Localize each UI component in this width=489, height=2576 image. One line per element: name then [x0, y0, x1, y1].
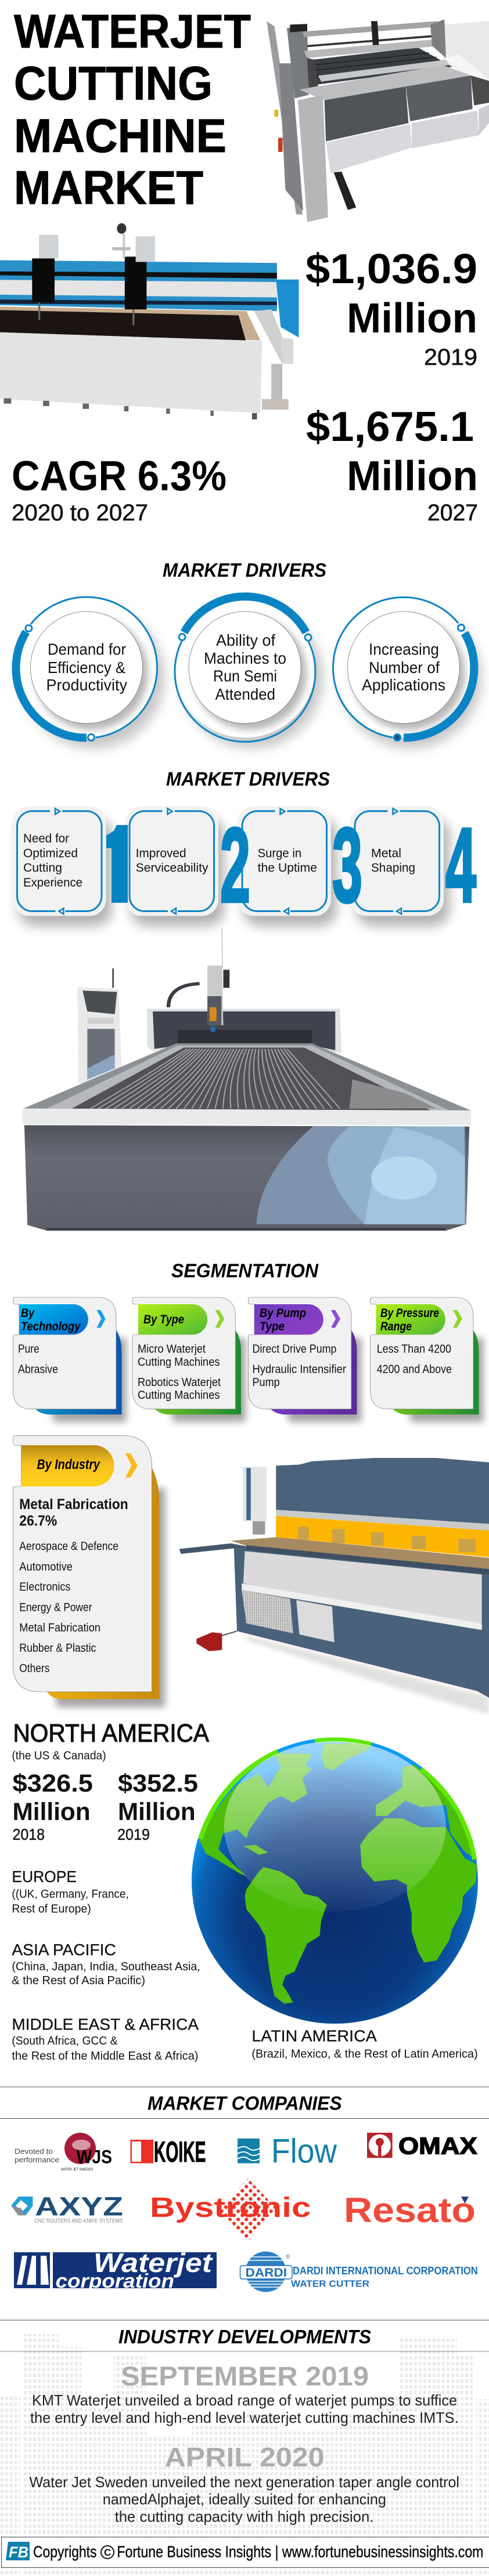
header text: Technology	[21, 1320, 81, 1333]
panel: by technology	[13, 1297, 127, 1422]
machine photo: shearing machine	[179, 1458, 489, 1714]
card 1 text: Experience	[23, 876, 82, 889]
card 4 text: Shaping	[371, 862, 415, 875]
stat: 2019	[117, 1770, 198, 1843]
footer bar	[2, 2537, 489, 2567]
panel: by pump type	[249, 1297, 361, 1422]
driver circle 2: Run Semi	[213, 667, 277, 685]
region: asia pacific: ASIA PACIFIC	[12, 1941, 116, 1959]
list: Energy & Power	[19, 1601, 92, 1614]
heading: market companies: MARKET COMPANIES	[148, 2092, 342, 2114]
title: CUTTING	[14, 57, 213, 110]
text block: april 2020: the cutting capacity with high precision.	[115, 2508, 373, 2526]
logo: Dardi: DARDI	[246, 2266, 287, 2280]
title: MARKET	[14, 161, 203, 215]
highlight: metal fabrication share: Metal Fabrication	[19, 1496, 128, 1513]
panel: by pressure range	[371, 1297, 483, 1422]
header pill	[254, 1304, 323, 1334]
header text	[21, 1307, 81, 1333]
north america	[200, 1753, 312, 1876]
stat: 2018: Million	[13, 1798, 91, 1826]
list: Hydraulic Intensifier	[252, 1363, 346, 1376]
list: Robotics Waterjet	[138, 1376, 221, 1389]
region: asia pacific: & the Rest of Asia Pacific)	[12, 1974, 145, 1987]
driver circle 2: Ability of	[216, 631, 275, 649]
heading: market drivers: MARKET DRIVERS	[163, 559, 326, 581]
list: Aerospace & Defence	[19, 1540, 118, 1553]
driver circle 1: Efficiency &	[48, 659, 125, 676]
logo: AXYZ: AXYZ	[35, 2192, 123, 2221]
stat: CAGR: CAGR 6.3%	[12, 453, 226, 500]
region: europe: Rest of Europe)	[12, 1903, 91, 1916]
stat: 2019 market value	[305, 246, 477, 370]
header text	[260, 1307, 306, 1333]
icon: chevron	[96, 1310, 106, 1327]
stat: 2019 market value: Million	[347, 295, 477, 342]
list	[18, 1343, 58, 1376]
list: Metal Fabrication	[19, 1622, 100, 1634]
logo: Resato: Resato	[344, 2191, 476, 2230]
logo: Flow: Flow	[271, 2133, 337, 2170]
list	[252, 1343, 346, 1389]
header text: By	[21, 1307, 35, 1320]
heading: industry developments: INDUSTRY DEVELOPMENTS	[118, 2326, 371, 2347]
stat: 2019 market value: 2019	[424, 345, 477, 370]
card 1 text: Optimized	[23, 847, 78, 860]
header text: By Pressure	[380, 1307, 439, 1320]
stat: 2018	[13, 1770, 93, 1843]
card 1 text	[23, 832, 82, 889]
driver circle 1: Productivity	[46, 676, 127, 694]
machine photo: large cutting bed	[23, 928, 471, 1231]
stat: 2019: $352.5	[118, 1770, 198, 1797]
text block: september 2019: SEPTEMBER 2019	[121, 2361, 369, 2392]
driver circle 3	[333, 597, 481, 748]
list	[377, 1343, 452, 1376]
text block: september 2019: the entry level and high-end level waterjet cutting machines IMTS.	[30, 2409, 459, 2426]
text block: april 2020: Water Jet Sweden unveiled the next generation taper angle control	[29, 2473, 459, 2491]
stat: 2027 market value: 2027	[427, 500, 478, 526]
region: middle east and africa	[12, 2016, 199, 2063]
list: Direct Drive Pump	[252, 1343, 337, 1356]
list: Electronics	[19, 1581, 70, 1594]
card 3 base	[238, 806, 337, 926]
stat: 2018: $326.5	[13, 1770, 93, 1797]
list: Pump	[252, 1376, 280, 1389]
logo: OMAX: OMAX	[398, 2133, 477, 2159]
card 4 base	[350, 806, 450, 926]
logo: Dardi: ®	[286, 2254, 290, 2260]
copyright text: C	[104, 2547, 111, 2558]
header pill	[19, 1304, 88, 1334]
stat: 2019: 2019	[117, 1826, 150, 1843]
machine photo: blue waterjet table	[0, 223, 299, 419]
logo: Waterjet Corporation: Waterjet	[94, 2248, 213, 2278]
stat: 2027 market value: Million	[347, 453, 478, 500]
logo: Dardi: WATER CUTTER	[291, 2280, 369, 2289]
panel: driver circles	[16, 596, 481, 748]
logo: WJS: WATER JET SWEDEN	[61, 2168, 93, 2172]
europe and asia	[376, 1765, 477, 1861]
driver circle 2: Attended	[215, 685, 275, 703]
number 2: 2	[220, 806, 250, 924]
logo: Dardi: DARDI INTERNATIONAL CORPORATION	[293, 2265, 478, 2277]
heading: segmentation: SEGMENTATION	[171, 1260, 319, 1281]
list: Cutting Machines	[138, 1356, 220, 1369]
panel: numbered driver cards	[13, 806, 476, 926]
logo: WJS	[15, 2133, 112, 2172]
logo: Waterjet Corporation: corporation	[56, 2270, 174, 2292]
stat: CAGR	[12, 453, 226, 526]
driver circle 2	[175, 596, 323, 748]
list: Less Than 4200	[377, 1343, 451, 1356]
panel: by industry	[13, 1436, 165, 1707]
highlight: metal fabrication share: 26.7%	[19, 1513, 57, 1529]
card 4 text: Metal	[371, 847, 401, 860]
card 2 text: Improved	[136, 847, 186, 860]
logo: OMAX	[367, 2133, 477, 2159]
panel: north america	[12, 1719, 210, 1843]
card 3 text: Surge in	[258, 847, 301, 860]
region: middle east and africa: MIDDLE EAST & AFRICA	[12, 2016, 199, 2034]
logo: Bystronic	[150, 2179, 311, 2241]
card 3 text	[258, 847, 317, 875]
card 2 text: Serviceability	[136, 862, 208, 875]
stat: 2027 market value	[306, 404, 478, 526]
number 1	[106, 825, 128, 903]
stat: 2018: 2018	[13, 1826, 45, 1843]
card 3 text: the Uptime	[258, 862, 317, 875]
title: MACHINE	[14, 110, 226, 162]
stat: CAGR: 2020 to 2027	[12, 500, 148, 526]
logo: Waterjet Corporation	[14, 2248, 217, 2292]
stat: 2019 market value: $1,036.9	[305, 246, 477, 292]
region: middle east and africa: (South Africa, GCC &	[12, 2035, 118, 2047]
list: Micro Waterjet	[138, 1343, 206, 1356]
region: latin america: LATIN AMERICA	[251, 2027, 377, 2045]
number 3: 3	[332, 806, 362, 924]
region: asia pacific	[12, 1941, 200, 1987]
logo: Koike	[130, 2136, 206, 2168]
icon: chevron	[453, 1310, 462, 1327]
list: Cutting Machines	[138, 1389, 220, 1402]
region: middle east and africa: the Rest of the Middle East & Africa)	[12, 2050, 199, 2063]
header text: Type	[260, 1320, 285, 1333]
list: Rubber & Plastic	[19, 1642, 96, 1655]
south america	[245, 1867, 327, 2003]
card 2 base	[125, 806, 224, 926]
card 1 text: Cutting	[23, 862, 62, 875]
machine photo: top right cutting table	[267, 19, 489, 222]
driver circle 2: Machines to	[204, 649, 286, 667]
panel: north america: NORTH AMERICA	[13, 1719, 210, 1748]
logo: WJS: WJS	[77, 2147, 112, 2168]
title: WATERJET	[14, 5, 251, 58]
region: latin america: (Brazil, Mexico, & the Rest of Latin America)	[251, 2048, 478, 2061]
copyright text: Copyrights	[33, 2543, 96, 2561]
list: Automotive	[19, 1561, 73, 1573]
logo: Bystronic: Bystronic	[150, 2193, 311, 2223]
panel: north america: (the US & Canada)	[12, 1750, 106, 1763]
africa	[360, 1818, 477, 1963]
driver circle 3: Increasing	[369, 641, 439, 659]
list	[19, 1540, 118, 1675]
header pill	[376, 1304, 445, 1334]
region: europe	[12, 1868, 129, 1916]
header text: By Pump	[260, 1307, 306, 1320]
panel: by type	[132, 1297, 246, 1422]
text block: april 2020: namedAlphajet, ideally suited for enhancing	[103, 2491, 386, 2508]
icon: chevron	[125, 1453, 138, 1478]
stat: 2027 market value: $1,675.1	[306, 404, 474, 450]
text block: april 2020	[29, 2442, 459, 2526]
driver circle 1: Demand for	[48, 641, 126, 659]
list	[138, 1343, 221, 1402]
stat: 2019: Million	[118, 1798, 196, 1826]
illustration: globe	[192, 1738, 478, 2024]
region: europe: EUROPE	[12, 1868, 77, 1886]
region: latin america	[251, 2027, 478, 2061]
text block: april 2020: APRIL 2020	[165, 2442, 324, 2472]
heading: market drivers second: MARKET DRIVERS	[166, 768, 330, 790]
list: Abrasive	[18, 1363, 58, 1376]
panel: company logos	[11, 2133, 478, 2292]
list: Others	[19, 1662, 49, 1675]
region: asia pacific: (China, Japan, India, Southeast Asia,	[12, 1960, 200, 1973]
header text: By Industry	[37, 1457, 100, 1472]
text block: september 2019: KMT Waterjet unveiled a broad range of waterjet pumps to suffice	[32, 2392, 457, 2409]
text block: september 2019	[30, 2361, 459, 2426]
header text	[380, 1307, 439, 1333]
logo: WJS: Devoted to	[15, 2147, 53, 2156]
driver circle 1	[16, 597, 164, 748]
card 4 text	[371, 847, 415, 875]
logo: Koike: KOIKE	[154, 2136, 206, 2168]
header pill	[21, 1445, 114, 1486]
header pill	[138, 1304, 207, 1334]
header text: By Type	[143, 1313, 184, 1326]
greenland	[321, 1743, 371, 1771]
logo: Flow	[238, 2133, 337, 2170]
logo: fortune business insights: FB	[9, 2544, 28, 2561]
logo: AXYZ: CNC ROUTERS AND KNIFE SYSTEMS	[34, 2218, 123, 2224]
highlight: metal fabrication share	[19, 1496, 128, 1529]
header text: Range	[380, 1320, 412, 1333]
icon: chevron	[331, 1310, 340, 1327]
region: europe: ((UK, Germany, France,	[12, 1888, 129, 1901]
driver circle 3: Number of	[369, 659, 440, 676]
card 2 text	[136, 847, 208, 875]
logo: WJS: performance	[15, 2155, 59, 2164]
caribbean islands	[243, 1845, 268, 1855]
card 1 base	[13, 806, 112, 926]
logo: Dardi	[240, 2252, 478, 2292]
card 1 text: Need for	[23, 832, 69, 845]
list: 4200 and Above	[377, 1363, 452, 1376]
list: Pure	[18, 1343, 39, 1356]
icon: chevron	[215, 1310, 224, 1327]
driver circle 3: Applications	[362, 676, 445, 694]
logo: AXYZ	[11, 2192, 123, 2224]
title	[14, 5, 251, 215]
